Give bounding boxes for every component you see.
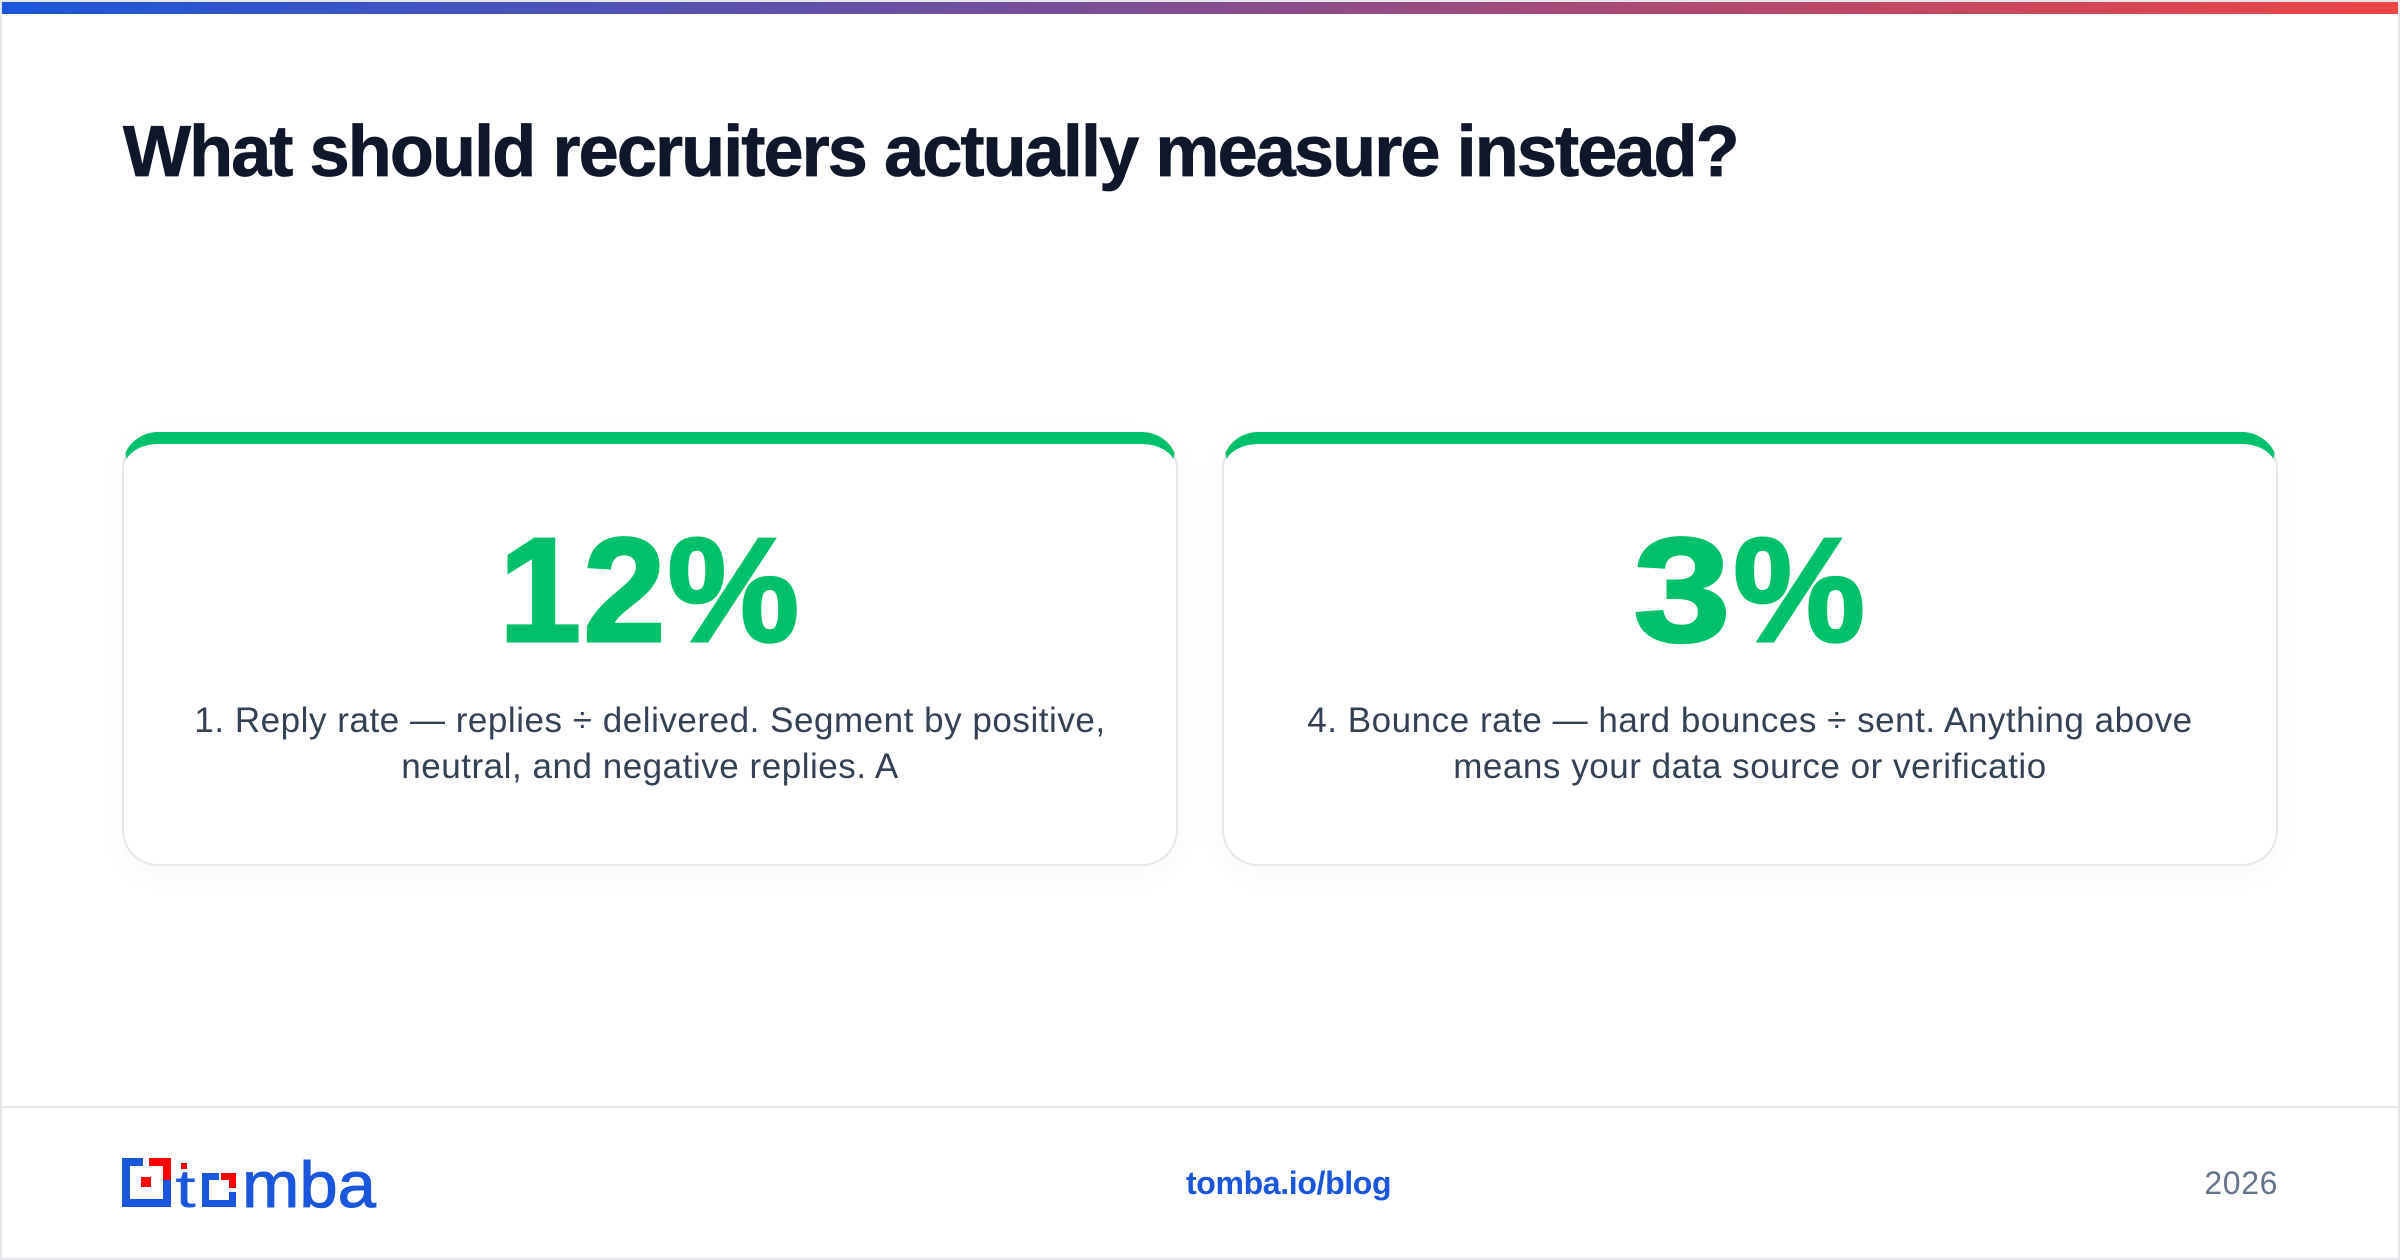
panel: reply rate card bbox=[122, 432, 1178, 866]
description: bounce rate: 4. Bounce rate — hard bounces ÷ sent. Anything above bbox=[1307, 701, 2193, 740]
description: bounce rate bbox=[1307, 701, 2193, 786]
logo: tomba bbox=[122, 1148, 377, 1221]
stat: 12%: 12% bbox=[499, 508, 801, 673]
logo wordmark: mba bbox=[242, 1148, 377, 1221]
stat: 3%: % bbox=[1733, 508, 1867, 673]
panel: bounce rate card bbox=[1222, 432, 2278, 866]
logo wordmark: t bbox=[175, 1159, 196, 1219]
footer year: 2026 bbox=[2204, 1165, 2278, 1201]
top gradient bar bbox=[2, 2, 2398, 14]
description: reply rate: 1. Reply rate — replies ÷ delivered. Segment by positive, bbox=[194, 701, 1106, 740]
stat: 3%: 3 bbox=[1633, 508, 1733, 673]
icon: square mark bbox=[122, 1158, 171, 1207]
title: What should recruiters actually measure instead? bbox=[123, 112, 1738, 192]
logo wordmark bbox=[175, 1148, 377, 1221]
footer link: tomba.io/blog bbox=[1186, 1165, 1391, 1201]
description: reply rate bbox=[194, 701, 1106, 786]
icon: letter t dot bbox=[181, 1163, 187, 1169]
description: bounce rate: means your data source or verificatio bbox=[1453, 747, 2047, 786]
stat: 3% bbox=[1633, 508, 1867, 673]
icon: letter o box bbox=[202, 1173, 236, 1207]
description: reply rate: neutral, and negative replies. A bbox=[401, 747, 899, 786]
